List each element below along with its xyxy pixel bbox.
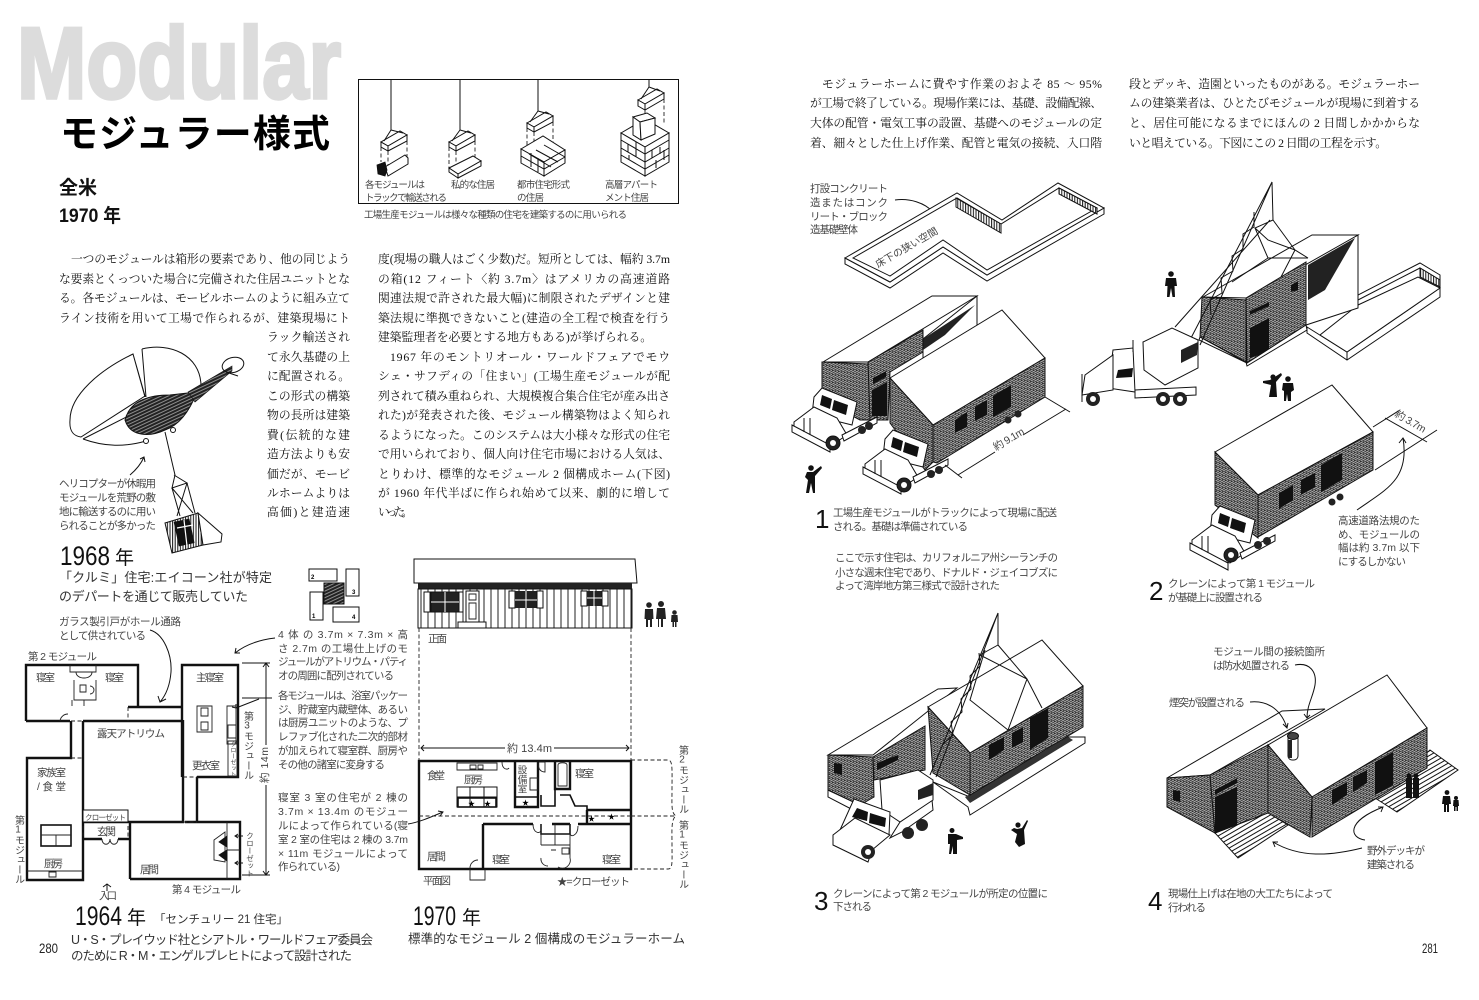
label: front: 正面 (428, 633, 447, 645)
note: four modules (278, 628, 408, 682)
room labels: 露天アトリウム (97, 728, 165, 740)
stars and labels: 厨房 (464, 774, 483, 786)
illustration step 2 top: crane placing module (1082, 182, 1440, 406)
stars and labels: 寝室 (602, 853, 621, 866)
text: 1964 description (71, 932, 373, 963)
page number 280: 280 (39, 940, 58, 956)
step 4 caption (1168, 887, 1333, 914)
diagram captions (365, 179, 658, 204)
step 3 caption: 下される (833, 901, 872, 913)
entry and closet arrows (103, 698, 272, 891)
body text: left column: に配置される。 (267, 369, 350, 383)
note: foundation walls: 造基礎壁体 (810, 223, 858, 236)
text: 1968 description: 「クルミ」住宅:エイコーン社が特定 (59, 570, 272, 585)
room labels: 厨房 (44, 858, 63, 870)
room labels: 家族室 (37, 766, 66, 779)
crane truck (1082, 328, 1198, 406)
stars and labels: ★ (522, 799, 529, 807)
note: foundation walls: 造またはコンク (810, 196, 888, 209)
note: three-bedroom house (278, 791, 408, 873)
text: 1964 description: のために R・M・エンゲルブレヒトによって設計された (71, 948, 352, 963)
left module (828, 688, 957, 755)
helicopter note: 地に輸送するのに用い (59, 505, 156, 518)
label: plan: 平面図 (423, 875, 451, 887)
hanging cables (391, 79, 649, 130)
room labels (12, 650, 254, 902)
note: three-bedroom house: 作られている) (278, 861, 340, 873)
stars and labels: ★ (468, 800, 475, 808)
body text: left column: 費(伝統的な建 (267, 428, 350, 442)
note: four modules: 4 体 の 3.7m × 7.3m × 高 (278, 628, 408, 641)
arrow: module brackets (631, 760, 676, 869)
body text: left column: 物の長所は建築 (267, 408, 350, 422)
room labels: クローゼット (229, 741, 236, 777)
fixtures (457, 762, 567, 790)
mini diagram: four modules around atrium (309, 569, 359, 622)
room labels: 第1モジュール (12, 814, 24, 884)
illustration: concrete foundation (845, 183, 1104, 288)
figures: workers (1165, 271, 1294, 401)
step 4 caption: 行われる (1168, 901, 1206, 914)
step 4 caption: 現場仕上げは在地の大工たちによって (1168, 887, 1333, 900)
left module (1167, 709, 1325, 778)
arrow: 1970 plan reference (408, 811, 443, 824)
body text: left column: 一つのモジュールは箱形の要素であり、他の同じよう (71, 252, 350, 266)
note: outdoor deck (1367, 844, 1426, 871)
stars and labels: 居間 (427, 851, 446, 863)
stars and labels: ★ (588, 815, 595, 823)
body text: right column: 1967 年のモントリオール・ワールドフェアでモウ (390, 350, 670, 364)
note: house description: 小さな週末住宅であり、ドナルド・ジェイコブズに (835, 566, 1058, 579)
figures: family (644, 601, 678, 627)
step 2 number: 2 (1149, 576, 1163, 606)
location and year (59, 177, 121, 227)
note: four modules: オの周囲に配列されている (278, 670, 394, 682)
dimension: approx 3.7 m: 約 3.7m (1392, 407, 1429, 436)
legend: star closet: ★=クローゼット (557, 876, 630, 888)
room labels: 第3モジュール (242, 710, 254, 780)
arrows: outdoor deck (1273, 807, 1383, 854)
stars and labels: 食堂 (427, 770, 445, 782)
windows and door (424, 591, 608, 628)
body text: left column (59, 252, 350, 519)
step 1 caption: 工場生産モジュールがトラックによって現場に配送 (833, 506, 1058, 519)
figure: worker waving (805, 465, 822, 493)
sling and cable (165, 432, 195, 516)
label: 2nd module: 第2モジュール (676, 744, 688, 814)
arrow: chimney (1250, 702, 1288, 728)
arrow: foundation note (895, 200, 933, 212)
diagram captions: の住居 (517, 192, 544, 204)
chimney (1288, 732, 1298, 760)
right module (1268, 675, 1427, 797)
watermark word: Modular: Modular (17, 8, 341, 120)
step 1 caption: される。基礎は準備されている (833, 520, 968, 533)
dimension: approx 13.4 m (421, 741, 629, 755)
step 2 caption: クレーンによって第 1 モジュール (1168, 577, 1315, 590)
body text: right column: で用いられており、個人向け住宅市場における人気は、 (378, 447, 670, 461)
arrow: road regulation note (1357, 438, 1406, 510)
location and year: 1970 年 (59, 204, 121, 227)
illustration: helicopter carrying module (70, 347, 246, 553)
location and year: 全米 (59, 177, 97, 199)
helicopter note (59, 477, 156, 532)
body text: right page column 1 (810, 77, 1102, 150)
body text: right page column 1: モジュラーホームに費やす作業のおよそ 85 〜 95% (822, 77, 1102, 91)
body text: right column (378, 252, 670, 519)
body text: right page column 1: 大体の配管・電気工事の設置、基礎へのモジュールの定 (810, 116, 1102, 130)
front truck (863, 430, 948, 494)
note: waterproof joint: モジュール間の接続箇所 (1213, 645, 1326, 658)
room labels: /食堂 (37, 781, 66, 793)
note: three-bedroom house: ルによって作られている(寝 (278, 819, 408, 832)
note: module packages: レファブ化された二次的部材 (278, 730, 408, 743)
text: 1964 description: U・S・プレイウッド社とシアトル・ワールドフェア委員会 (71, 932, 373, 947)
heading: 1968: 1968 (60, 541, 110, 571)
stars and labels: 寝室 (575, 767, 594, 780)
room labels: 居間 (140, 864, 159, 876)
note: house description (835, 551, 1058, 592)
closet and entry (83, 810, 128, 822)
step 1 number: 1 (815, 504, 829, 534)
note: three-bedroom house: 3.7m × 13.4m のモジュー (278, 806, 408, 818)
note: road regulation: め、モジュールの (1338, 529, 1420, 541)
heading: 1964 (75, 901, 288, 931)
body text: right page column 1: が工場で終了している。現場作業には、基礎、設備配線、 (810, 96, 1102, 110)
room labels: 第 4 モジュール (172, 883, 241, 896)
body text: right page column 2 (1129, 77, 1420, 150)
body text: left column: この形式の構築 (267, 389, 350, 403)
note: foundation walls (810, 182, 888, 236)
arrow: four modules (235, 638, 275, 653)
diagram captions: 高層アパート (605, 179, 658, 191)
truck module (377, 130, 408, 176)
heading: 1964: 1964 (75, 901, 122, 931)
diagram captions: メント住居 (605, 192, 649, 204)
figures (948, 820, 1028, 854)
note: module packages: は厨房ユニットのような、プ (278, 717, 408, 729)
dimension: approx 3.7 m (1373, 407, 1437, 470)
room labels: 更衣室 (192, 760, 220, 772)
heading: 1970: 1970 (413, 901, 456, 931)
heading: 1970: 年 (462, 907, 481, 929)
heading: 1964: 年 (127, 907, 146, 929)
note: glass sliding door: ガラス製引戸がホール通路 (59, 615, 182, 628)
step 3 caption: クレーンによって第 2 モジュールが所定の位置に (833, 887, 1048, 900)
label: 1st module: 第1モジュール (676, 819, 688, 889)
room labels: 第 2 モジュール (28, 650, 97, 663)
step 2 caption: が基礎上に設置される (1168, 591, 1263, 604)
note: module packages: 各モジュールは、浴室パッケー (278, 689, 408, 702)
label: crawl space: 床下の狭い空間 (873, 224, 940, 271)
note: house description: ここで示す住宅は、カリフォルニア州シーランチの (835, 551, 1058, 564)
truck (1190, 506, 1275, 570)
text: 1968 description (59, 570, 272, 604)
floor plan: 1970 house (419, 761, 631, 880)
room labels: 主寝室 (196, 671, 224, 684)
elevation: 1970 house front (414, 559, 637, 628)
room labels: クローゼット (85, 812, 126, 822)
body text: right column: 列されて積み重ねられ、大規模複合集合住宅が産み出さ (378, 389, 670, 403)
body text: left column: な要素とくっついた場合に完備された住居ユニットとな (59, 272, 350, 286)
dimension: approx 14 m: 約 14m (258, 747, 271, 783)
note: module packages: ジ、貯蔵室内蔵壁体、あるい (278, 703, 408, 716)
rear truck (792, 388, 877, 452)
body text: right column: の箱(12 フィート〈約 3.7m〉はアメリカの高速道路 (378, 272, 670, 286)
kitchen and family furniture (41, 825, 71, 846)
step 3 number: 3 (814, 886, 828, 916)
note: house description: よって湾岸地方第三様式で設計された (835, 579, 1000, 592)
room labels: 寝室 (105, 671, 124, 684)
page number 281: 281 (1422, 940, 1438, 956)
front module (890, 310, 1045, 470)
body text: left column: ライン技術を用いて工場で作られるが、建築現場にト (59, 311, 350, 325)
walls (26, 665, 240, 880)
body text: right page column 2: いと唱えている。下図にこの 2 日間の工程を示す。 (1129, 136, 1387, 150)
mini diagram: four modules around atrium: 2 (311, 575, 315, 581)
note: three-bedroom house: 寝室 3 室の住宅が 2 棟の (278, 791, 408, 804)
note: module packages: その他の諸室に変身する (278, 758, 385, 771)
panel: module types diagram (358, 79, 678, 204)
diagram captions: トラックで輸送される (365, 192, 447, 204)
right foundation (1307, 263, 1440, 360)
note: four modules: ジュールがアトリウム・パティ (278, 655, 408, 668)
body text: left column: て永久基礎の上 (267, 350, 350, 364)
text: 1968 description: のデパートを通じて販売していた (59, 589, 248, 604)
step 3 caption (833, 887, 1048, 913)
dimension: approx 9.1 m: 約 9.1m (991, 425, 1027, 454)
bath fixtures (70, 665, 96, 706)
body text: right column: 建築監理者を必要とする地方もある)が挙げられる。 (378, 330, 652, 344)
arrow: glass door (150, 630, 171, 702)
placed module (1199, 235, 1358, 366)
body text: right column: るようになった。このシステムは大小様々な形式の住宅 (378, 428, 670, 442)
diagram captions: 都市住宅形式 (517, 179, 570, 191)
body text: right column: とりわけ、標準的なモジュール 2 個構成ホーム(下図) (378, 467, 670, 481)
mini diagram: four modules around atrium: 1 (312, 614, 316, 620)
decks (1215, 812, 1288, 858)
stars and labels: 設備室 (516, 765, 527, 794)
body text: right column: れた)が発表された後、モジュール構築物はよく知られ (378, 408, 670, 422)
note: road regulation: 幅は約 3.7m 以下 (1338, 541, 1420, 554)
heading: 1968: 年 (115, 547, 134, 569)
private house module (449, 130, 481, 178)
title: モジュラー様式 (60, 114, 330, 156)
crane truck (833, 770, 933, 862)
body text: right column: 度(現場の職人はごく少数)だ。短所としては、幅約 3.7m (378, 252, 670, 266)
dimension: approx 9.1 m (945, 397, 1070, 478)
caption: module diagram: 工場生産モジュールは様々な種類の住宅を建築するのに用いられる (364, 209, 627, 221)
body text: right page column 2: と、居住可能になるまでにほんの 2 日間しかかからな (1129, 116, 1420, 130)
mini diagram: four modules around atrium: 3 (352, 590, 356, 596)
note: module packages: が加えられて寝室群、厨房や (278, 744, 408, 757)
dimension: approx 14 m (242, 663, 271, 875)
diagram captions: 各モジュールは (365, 179, 425, 191)
stars and labels (427, 765, 621, 866)
illustration step 4: finished house (1167, 675, 1459, 858)
room labels: 玄関 (97, 825, 116, 838)
illustration step 1: modules on trucks (792, 296, 1070, 494)
body text: left column: ルホームよりは (267, 486, 350, 500)
slung module (165, 513, 203, 553)
body text: right page column 2: ムの建築業者は、ひとたびモジュールが現場に到着する (1129, 96, 1420, 110)
illustration step 2 bottom: module on truck (1190, 385, 1437, 570)
body text: left column: る。各モジュールは、モービルホームのように組み立て (59, 291, 350, 305)
note: module packages (278, 689, 408, 771)
note: foundation walls: リート・ブロック (810, 210, 888, 223)
step 1 caption (833, 506, 1058, 533)
note: waterproof joint: は防水処置される (1213, 659, 1290, 672)
body text: right column: シェ・サフディの「住まい」(工場生産モジュールが配 (378, 369, 670, 383)
illustration step 3: crane placing second module (828, 613, 1085, 862)
note: road regulation: 高速道路法規のた (1338, 514, 1420, 527)
helicopter note: モジュールを荒野の敷 (59, 491, 156, 504)
note: road regulation (1338, 514, 1420, 568)
stars and labels: ★ (608, 813, 615, 821)
body text: right page column 1: 着、細々とした仕上げ作業、配管と電気の接続、入口階 (810, 136, 1102, 150)
heading: 1964: 「センチュリー 21 住宅」 (154, 912, 288, 926)
boom (930, 613, 1042, 777)
helicopter note: られることが多かった (59, 519, 156, 532)
dashed guides (419, 628, 631, 760)
body text: left column: ラック輸送され (267, 330, 350, 344)
rear module (822, 296, 977, 420)
note: glass sliding door: として供されている (59, 629, 146, 642)
stars and labels: ★ (484, 800, 491, 808)
note: outdoor deck: 野外デッキが (1367, 844, 1426, 857)
body text: right column: いった。 (378, 505, 413, 519)
mini diagram: four modules around atrium: 4 (352, 615, 356, 621)
walls (419, 761, 631, 869)
note: glass sliding door (59, 615, 182, 642)
step 4 number: 4 (1148, 886, 1162, 916)
body text: left column: 高価)と建造速 (267, 505, 350, 519)
note: foundation walls: 打設コンクリート (810, 182, 888, 195)
note: three-bedroom house: 室 2 室の住宅は 2 棟の 3.7m (278, 833, 408, 846)
crane boom and cables (1175, 182, 1308, 345)
dimension: approx 13.4 m: 約 13.4m (507, 741, 552, 755)
room labels: 寝室 (36, 671, 55, 684)
body text: right page column 2: 段とデッキ、造園といったものがある。モジュラーホー (1129, 77, 1420, 91)
high-rise module (621, 87, 669, 176)
helicopter note: ヘリコプターが休暇用 (59, 477, 156, 490)
note: chimney: 煙突が設置される (1169, 696, 1245, 709)
body text: right column: が 1960 年代半ばに作られ始めて以来、劇的に増して (378, 486, 670, 500)
step 2 caption (1168, 577, 1315, 604)
note: road regulation: にするしかない (1338, 556, 1406, 568)
body text: right column: 関連法規で許された最大幅)に制限されたデザインと建 (378, 291, 670, 305)
rotor blades (70, 347, 201, 445)
stars and labels: 寝室 (492, 853, 510, 866)
body text: right column: 築法規に準拠できないこと(建造の全工程で検査を行う (378, 311, 670, 325)
body text: left column: 価だが、モービ (267, 467, 350, 481)
note: three-bedroom house: × 11m モジュールによって (278, 848, 408, 860)
note: four modules: さ 2.7m の工場仕上げのモ (278, 642, 408, 655)
urban housing module (521, 111, 565, 176)
note: waterproof joint (1213, 645, 1326, 672)
figures (1406, 774, 1459, 812)
text: 1970 description: 標準的なモジュール 2 個構成のモジュラーホーム (408, 931, 685, 946)
arrow: helicopter note (130, 457, 145, 475)
body text: left column: 造方法よりも安 (267, 447, 350, 461)
diagram captions: 私的な住居 (451, 179, 495, 191)
slab (933, 737, 1085, 815)
arrow: waterproof joint (1295, 664, 1315, 718)
note: outdoor deck: 建築される (1367, 858, 1415, 871)
room labels: クローゼット (245, 832, 254, 877)
fuselage (125, 392, 197, 434)
right module (928, 640, 1083, 753)
floor plan: Century 21 house (12, 650, 272, 902)
room labels: 入口 (99, 890, 117, 902)
